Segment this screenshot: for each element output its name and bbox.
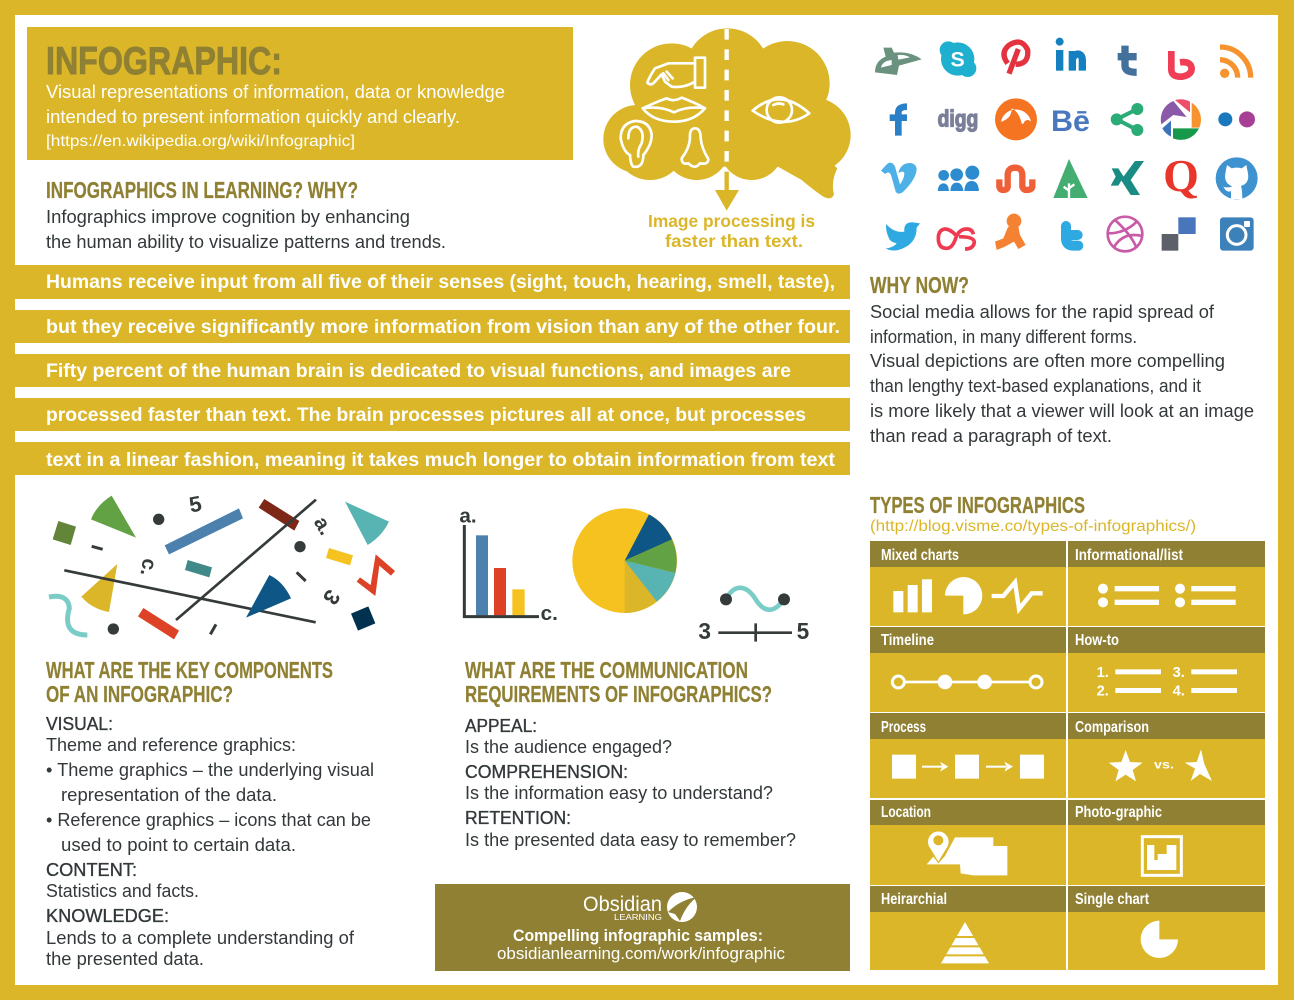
icon: flickr: [1218, 111, 1255, 127]
table labels: Heirarchial: [881, 891, 947, 908]
icon: dribbble: [1108, 217, 1142, 251]
text block: communication requirements: Is the information easy to understand?: [465, 783, 773, 803]
icon: delicious: [1162, 217, 1196, 251]
text block: infographics in learning: [46, 177, 446, 252]
icon: digg: digg: [938, 106, 978, 132]
icon: photo: [1142, 837, 1181, 875]
panel: obsidian learning callout: obsidianlearning.com/work/infographic: [497, 945, 785, 963]
table labels: Location: [881, 804, 931, 821]
icon: grooveshark: [995, 98, 1037, 140]
table labels: Photo-graphic: [1075, 804, 1162, 821]
text block: communication requirements: RETENTION:: [465, 808, 571, 828]
text block: key components: used to point to certain data.: [61, 835, 296, 855]
panel: obsidian learning callout: [435, 884, 850, 971]
panel: infographic definition: [27, 27, 573, 160]
table labels: [881, 547, 1183, 908]
panel: senses text bands: but they receive significantly more information from vision than any of the other four.: [46, 317, 840, 338]
icon: skype: [940, 41, 976, 77]
text block: key components: OF AN INFOGRAPHIC?: [46, 681, 233, 707]
squiggle and scale: 3: [698, 618, 711, 644]
text block: key components: VISUAL:: [46, 714, 113, 734]
text block: key components: CONTENT:: [46, 860, 137, 880]
icon: vimeo: [881, 163, 917, 194]
icon: aim: [995, 214, 1026, 250]
table icons: lower rows: [892, 749, 1212, 963]
text block: why now: Social media allows for the rapid spread of: [870, 302, 1215, 322]
illustration: key components shapes: a.: [309, 513, 338, 539]
text block: key components: KNOWLEDGE:: [46, 906, 169, 926]
text block: communication requirements: [465, 657, 796, 850]
icon: list: [1098, 584, 1236, 607]
definition text: [https://en.wikipedia.org/wiki/Infographic]: [46, 133, 355, 150]
caption: image processing: [648, 211, 815, 251]
pie chart: [572, 508, 677, 613]
panel: senses text bands: Humans receive input from all five of their senses (sight, touch, hearing, smell, taste),: [46, 272, 835, 293]
icon: how-to: [1097, 665, 1237, 700]
table icons: upper rows: [892, 577, 1237, 700]
panel: senses text bands: [15, 265, 850, 475]
illustration: key components shapes: c.: [135, 557, 161, 578]
squiggle and scale: 5: [797, 618, 809, 644]
icon: deviantart: [875, 48, 922, 75]
icon: rss: [1220, 47, 1251, 78]
text block: key components: Lends to a complete understanding of: [46, 928, 355, 948]
text block: why now: WHY NOW?: [870, 272, 969, 298]
bar chart: a.: [459, 504, 477, 527]
text block: communication requirements: Is the presented data easy to remember?: [465, 830, 796, 850]
icon: linkedin: [1056, 38, 1082, 71]
heading: types of infographics: TYPES OF INFOGRAPHICS: [870, 492, 1085, 518]
illustration: key components shapes: 3: [318, 585, 345, 609]
icon: how-to: 1.: [1097, 665, 1109, 681]
heading: types of infographics: (http://blog.visme.co/types-of-infographics/): [870, 518, 1196, 535]
logo: obsidian learning: [583, 892, 697, 922]
icon: how-to: 4.: [1173, 684, 1185, 700]
panel: senses text bands: Fifty percent of the human brain is dedicated to visual functions, and images are: [46, 361, 791, 382]
illustration: key components shapes: 5: [187, 491, 204, 518]
icon: github: [1216, 157, 1258, 199]
icon: myspace: [938, 166, 979, 191]
definition text: [46, 82, 505, 150]
text block: communication requirements: COMPREHENSION:: [465, 762, 628, 782]
icon: mixed charts: [893, 577, 1043, 614]
text block: key components: Theme and reference graphics:: [46, 735, 296, 755]
icon: twitter t: [1066, 226, 1078, 246]
panel: senses text bands: processed faster than text. The brain processes pictures all at once, but processes: [46, 405, 806, 426]
illustration: key components shapes: [49, 491, 395, 639]
table labels: Timeline: [881, 632, 934, 649]
icon: stumbleupon: [999, 168, 1032, 190]
illustration: senses thought cloud: [603, 28, 851, 211]
text block: key components: Statistics and facts.: [46, 881, 199, 901]
icon: share: [1111, 103, 1143, 136]
bar chart: c.: [541, 602, 558, 625]
text block: communication requirements: Is the audience engaged?: [465, 737, 672, 757]
logo: obsidian learning: LEARNING: [614, 912, 662, 922]
table labels: Mixed charts: [881, 547, 959, 564]
social media icon grid: [875, 38, 1258, 251]
icon: picasa: [1161, 99, 1201, 140]
icon: how-to: 3.: [1173, 665, 1185, 681]
text block: why now: Visual depictions are often more compelling: [870, 351, 1225, 371]
text block: key components: [46, 657, 374, 969]
icon: lastfm: [938, 229, 974, 249]
text block: infographics in learning: INFOGRAPHICS IN LEARNING? WHY?: [46, 177, 358, 203]
heading: types of infographics: [870, 492, 1196, 535]
caption: image processing: faster than text.: [665, 231, 803, 251]
icon: tumblr: [1118, 46, 1137, 72]
text block: why now: [870, 272, 1254, 446]
text block: key components: • Theme graphics – the underlying visual: [46, 760, 374, 780]
squiggle and scale: [698, 588, 809, 644]
title: INFOGRAPHIC:: [46, 40, 282, 83]
text block: communication requirements: WHAT ARE THE COMMUNICATION: [465, 657, 748, 683]
table labels: Single chart: [1075, 891, 1149, 908]
icon: xing: [1111, 161, 1144, 195]
text block: infographics in learning: the human ability to visualize patterns and trends.: [46, 232, 446, 252]
text block: communication requirements: APPEAL:: [465, 716, 537, 736]
icon: pyramid: [941, 922, 989, 963]
panel: obsidian learning callout: Compelling infographic samples:: [513, 927, 763, 945]
icon: bebo: [1171, 51, 1192, 77]
icon: process: [892, 755, 1044, 779]
text block: why now: is more likely that a viewer will look at an image: [870, 401, 1254, 421]
icon: facebook: [890, 107, 907, 136]
icon: instagram: [1220, 217, 1254, 251]
icon: location: [927, 831, 1007, 875]
panel: senses text bands: text in a linear fashion, meaning it takes much longer to obtain information from text: [46, 450, 836, 471]
icon: quora: Q: [1163, 150, 1199, 201]
icon: how-to: 2.: [1097, 684, 1109, 700]
icon: comparison: [1109, 749, 1212, 781]
icon: comparison: vs.: [1154, 758, 1174, 772]
table labels: Process: [881, 719, 926, 736]
icon: skype: S: [951, 47, 965, 71]
icon: timeline: [892, 675, 1042, 689]
icon: single chart: [1141, 921, 1178, 958]
icon: behance: Bē: [1051, 105, 1090, 138]
table: types of infographics: [870, 541, 1265, 970]
icon: forrst: [1053, 159, 1088, 198]
icon: pinterest: [1004, 42, 1028, 74]
bar chart: [459, 504, 558, 625]
text block: infographics in learning: Infographics improve cognition by enhancing: [46, 207, 410, 227]
text block: communication requirements: REQUIREMENTS OF INFOGRAPHICS?: [465, 681, 772, 707]
definition text: intended to present information quickly and clearly.: [46, 107, 460, 127]
text block: why now: than read a paragraph of text.: [870, 426, 1112, 446]
text block: key components: WHAT ARE THE KEY COMPONENTS: [46, 657, 333, 683]
definition text: Visual representations of information, data or knowledge: [46, 82, 505, 102]
text block: why now: than lengthy text-based explanations, and it: [870, 376, 1201, 396]
text block: key components: • Reference graphics – icons that can be: [46, 810, 371, 830]
table labels: Informational/list: [1075, 547, 1183, 564]
icon: twitter bird: [886, 222, 920, 251]
table labels: How-to: [1075, 632, 1119, 649]
logo: obsidian learning: Obsidian: [583, 893, 662, 916]
text block: key components: representation of the data.: [61, 785, 277, 805]
caption: image processing: Image processing is: [648, 211, 815, 231]
illustration: charts: [459, 504, 809, 644]
text block: key components: the presented data.: [46, 949, 204, 969]
table labels: Comparison: [1075, 719, 1149, 736]
text block: why now: information, in many different forms.: [870, 327, 1137, 347]
